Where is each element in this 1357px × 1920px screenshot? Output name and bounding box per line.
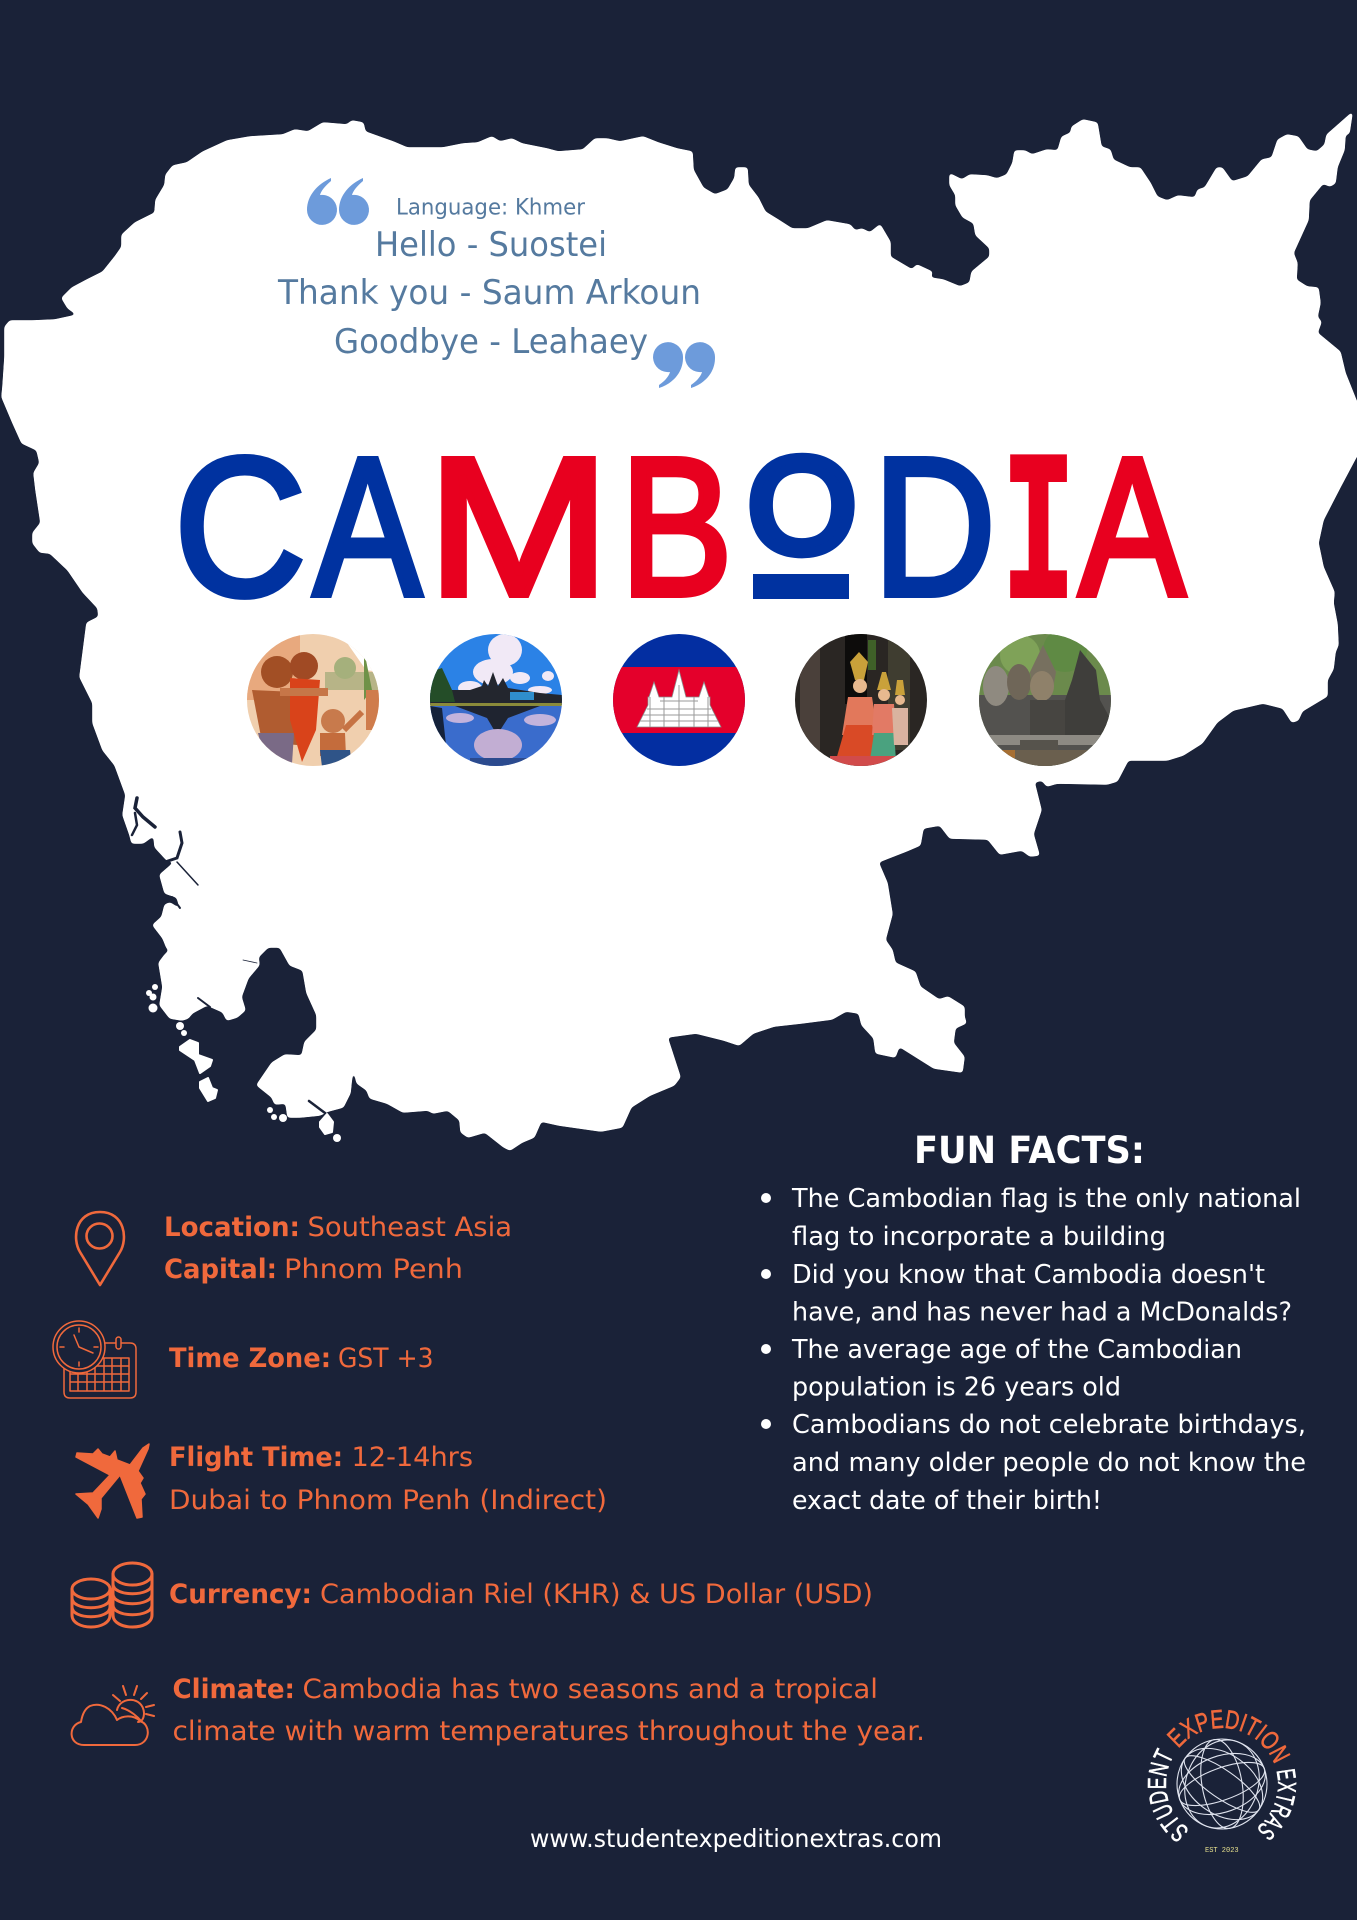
location and capital: Phnom Penh [284,1254,463,1285]
title: CAMBODIA: I [1002,419,1075,660]
climate: Cambodia has two seasons and a tropical [302,1674,878,1705]
fun facts list: have, and has never had a McDonalds? [792,1298,1292,1328]
photo: Cambodian children [247,634,380,767]
fun facts list: and many older people do not know the [792,1448,1306,1478]
language phrases: Hello - Suostei [375,225,607,265]
flight time: Flight Time: [169,1442,343,1473]
title: CAMBODIA: O [748,431,856,582]
icon: location pin [76,1212,124,1285]
language phrases: Thank you - Saum Arkoun [277,273,701,313]
flight time [169,1442,607,1516]
closing quote mark [653,342,715,388]
flight time: 12-14hrs [352,1442,473,1473]
time zone: GST +3 [338,1343,434,1374]
title: CAMBODIA: A [1079,416,1186,637]
time zone: Time Zone: [169,1343,331,1374]
fun facts list: population is 26 years old [792,1372,1121,1402]
language phrases: Language: Khmer [396,196,586,220]
title: CAMBODIA: D [873,417,996,637]
location and capital: Southeast Asia [308,1212,512,1243]
fun facts heading: FUN FACTS: [914,1129,1145,1172]
fun facts list: The Cambodian flag is the only national [791,1184,1301,1214]
photo: Cambodian flag [613,634,745,767]
icon: cloud and sun [72,1686,154,1745]
climate: Climate: [172,1674,295,1705]
fun facts list: Did you know that Cambodia doesn't [792,1260,1265,1290]
icon: airplane [76,1444,149,1518]
time zone [169,1343,434,1374]
icon: clock and calendar [53,1321,136,1398]
flight time: Dubai to Phnom Penh (Indirect) [169,1485,607,1516]
logo: Student Expedition Extras: EST 2023 [1205,1847,1239,1855]
logo: Student Expedition Extras [1148,1710,1296,1855]
title: CAMBODIA: B [620,417,733,637]
fun facts list: flag to incorporate a building [792,1222,1166,1252]
fun facts list: Cambodians do not celebrate birthdays, [792,1410,1306,1440]
map of Cambodia [2,113,1357,1150]
currency: Currency: [169,1579,312,1610]
title: CAMBODIA [174,416,1186,660]
photo: stone statues [979,628,1111,767]
fun facts list: The average age of the Cambodian [791,1335,1242,1365]
title: CAMBODIA: C [174,417,306,637]
opening quote mark [307,178,369,225]
location and capital: Location: [164,1212,300,1243]
location and capital: Capital: [164,1254,277,1285]
logo: Student Expedition Extras: EXTRAS [1258,1768,1296,1840]
climate [172,1674,925,1747]
currency: Cambodian Riel (KHR) & US Dollar (USD) [320,1579,873,1610]
photo: Angkor Wat reflection [430,634,562,767]
website url: www.studentexpeditionextras.com [530,1824,942,1853]
climate: climate with warm temperatures throughout the year. [172,1716,925,1747]
location and capital [164,1212,512,1285]
photo: Apsara dancers [795,634,927,768]
icon: coin stacks [72,1563,152,1627]
language phrases [277,196,701,362]
fun facts list [761,1184,1306,1516]
logo: Student Expedition Extras: EXPEDITION [1166,1710,1290,1764]
title: CAMBODIA: M [427,417,610,637]
language phrases: Goodbye - Leahaey [334,322,648,362]
title: CAMBODIA: A [314,418,422,637]
logo: Student Expedition Extras: STUDENT [1148,1748,1188,1842]
fun facts list: exact date of their birth! [792,1486,1102,1516]
